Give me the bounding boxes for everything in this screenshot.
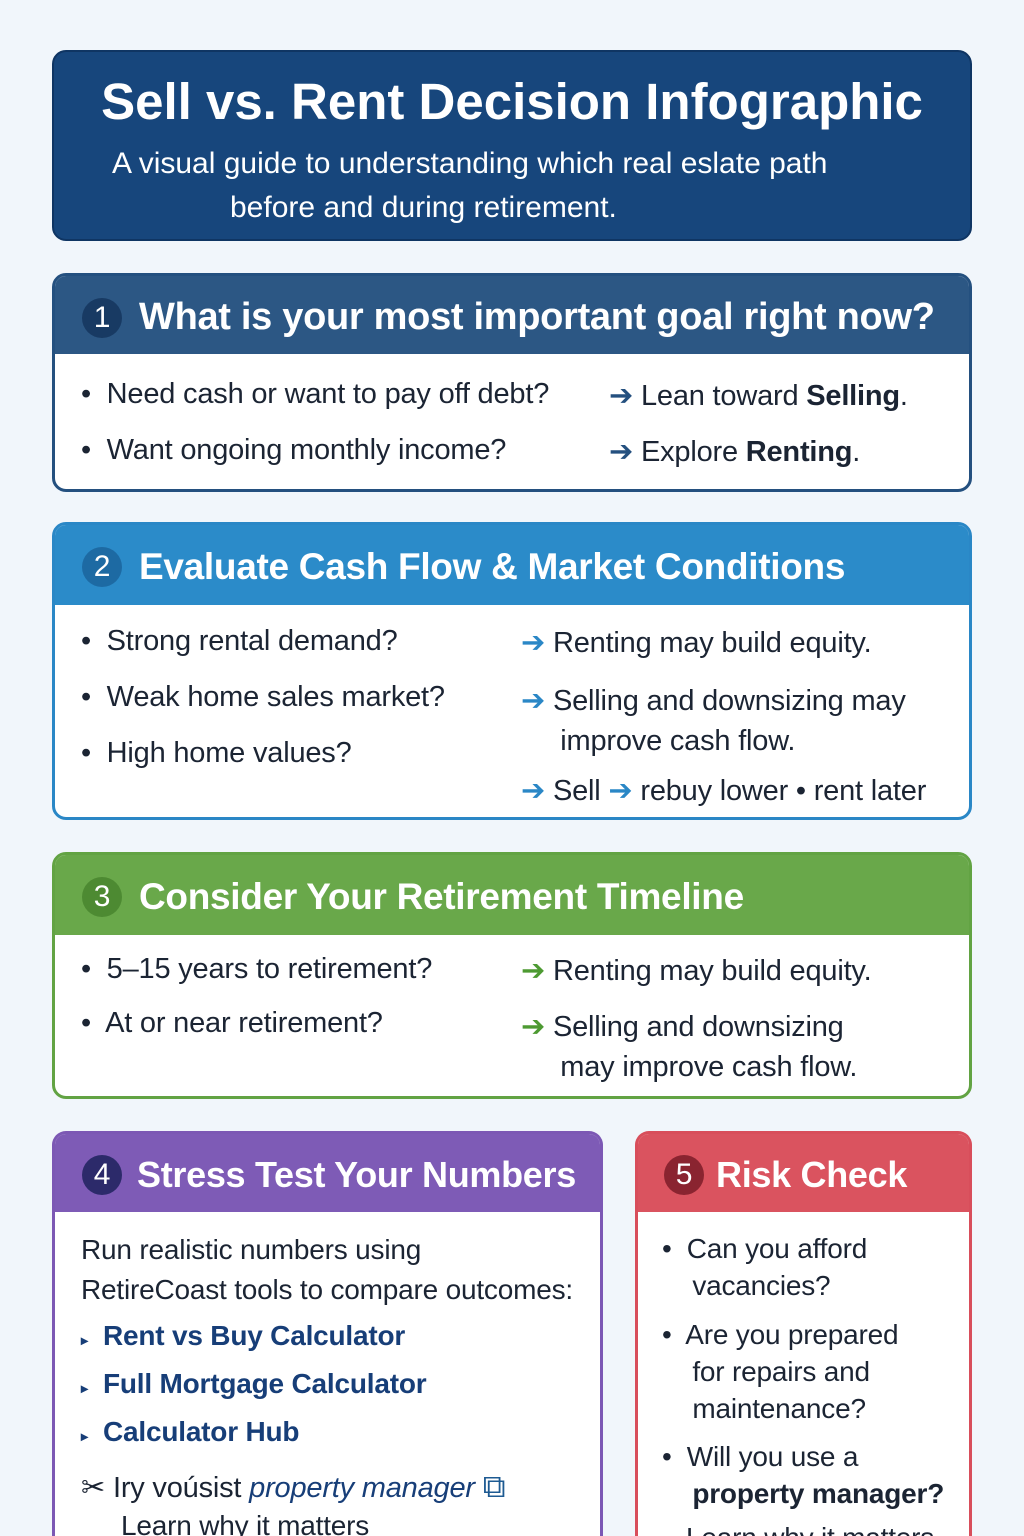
property manager link: ✂ Iry voúsist property manager ⧉	[81, 1468, 505, 1504]
panel 5: risk check: for repairs and	[692, 1356, 870, 1387]
subtitle: A visual guide to understanding which real eslate path	[112, 147, 827, 180]
panel 4: stress test: ▸ Calculator Hub	[81, 1416, 299, 1447]
bullets: vacancies?	[692, 1270, 830, 1301]
header 2: 2	[94, 550, 110, 583]
panel 3: timeline: ➔ Renting may build equity.	[521, 955, 871, 987]
header 5: Risk Check	[716, 1154, 907, 1195]
panel 4: stress test: ▸ Full Mortgage Calculator	[81, 1368, 426, 1399]
panel 5: risk check	[635, 1131, 972, 1536]
panel 3: timeline	[52, 852, 972, 1099]
panel 3: timeline: may improve cash flow.	[560, 1051, 857, 1083]
panel 5: risk check: • Are you prepared	[662, 1319, 898, 1350]
panel 3: timeline: ➔ Selling and downsizing	[521, 1011, 844, 1043]
intro text: RetireCoast tools to compare outcomes:	[81, 1274, 573, 1305]
subtitle	[112, 147, 827, 224]
panel 2: cash flow: • Weak home sales market?	[81, 681, 445, 713]
header 3	[55, 855, 969, 935]
header 1: 1	[94, 301, 110, 334]
header 5	[638, 1134, 969, 1212]
bullets	[662, 1233, 867, 1301]
header 5: 5	[676, 1158, 692, 1191]
header 3: 3	[94, 880, 110, 913]
panel 2: cash flow	[52, 522, 972, 820]
header 2: Evaluate Cash Flow & Market Conditions	[139, 546, 845, 587]
header 2	[55, 525, 969, 605]
intro text	[81, 1234, 573, 1305]
panel 2: cash flow: ➔ Selling and downsizing may	[521, 685, 906, 717]
panel 2: cash flow: ➔ Sell ➔ rebuy lower • rent later	[521, 775, 926, 807]
header 1: What is your most important goal right now?	[139, 296, 935, 338]
panel 1: goal: ➔ Lean toward Selling.	[609, 380, 908, 412]
panel 2: cash flow: improve cash flow.	[560, 725, 795, 757]
panel 2: cash flow: • High home values?	[81, 737, 352, 769]
subtitle: before and during retirement.	[230, 191, 617, 224]
header 3: Consider Your Retirement Timeline	[139, 876, 744, 917]
rows: • 5–15 years to retirement?	[81, 953, 432, 985]
panel 1: goal: ➔ Explore Renting.	[609, 436, 860, 468]
header 4	[55, 1134, 600, 1212]
intro text: Run realistic numbers using	[81, 1234, 421, 1265]
header 1	[55, 276, 969, 354]
header 4: Stress Test Your Numbers	[137, 1154, 576, 1195]
title banner	[52, 50, 972, 241]
header 4: 4	[94, 1158, 110, 1191]
panel 5: risk check: • Will you use a	[662, 1441, 858, 1472]
rows: • Strong rental demand?	[81, 625, 398, 657]
links: ▸ Rent vs Buy Calculator	[81, 1320, 405, 1351]
rows: • Need cash or want to pay off debt?	[81, 378, 549, 410]
panel 3: timeline: • At or near retirement?	[81, 1007, 383, 1039]
panel 1: goal: • Want ongoing monthly income?	[81, 434, 506, 466]
bullets: • Can you afford	[662, 1233, 867, 1264]
panel 2: cash flow: ➔ Renting may build equity.	[521, 627, 871, 659]
panel 1: goal	[52, 273, 972, 492]
panel 5: risk check: property manager?	[692, 1478, 944, 1509]
title: Sell vs. Rent Decision Infographic	[101, 73, 923, 130]
panel 5: risk check: maintenance?	[692, 1393, 866, 1424]
panel 4: stress test	[52, 1131, 603, 1536]
